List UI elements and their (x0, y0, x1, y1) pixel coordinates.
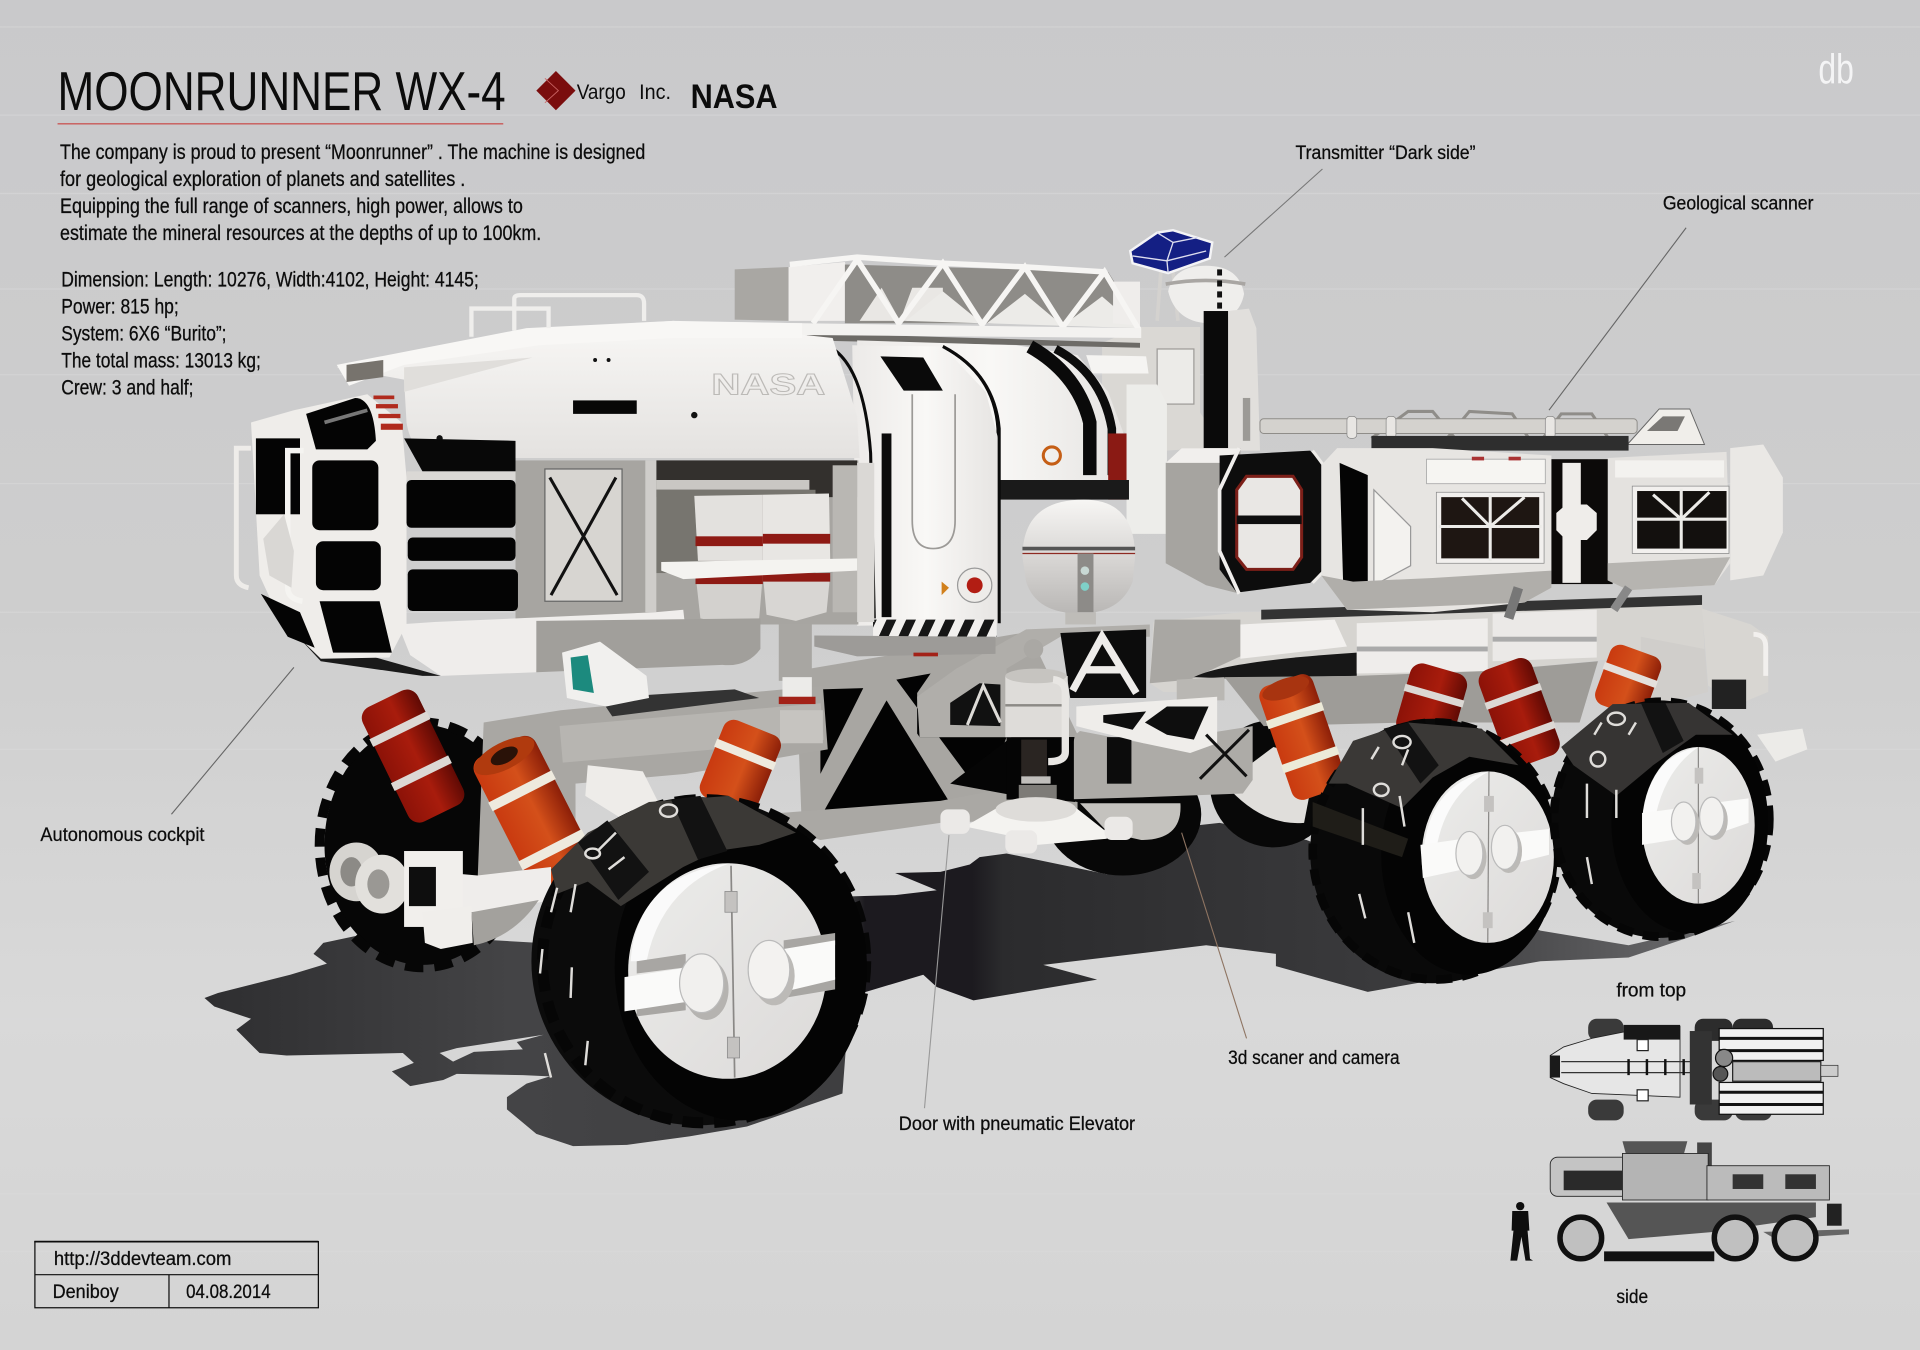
logo: Vargo Inc.: Vargo (577, 81, 626, 104)
wheel hub (624, 863, 835, 1079)
scanner window 2 (1632, 486, 1729, 553)
title underline (58, 123, 503, 125)
rear wheel (1551, 700, 1769, 938)
leader lines (171, 169, 1686, 1108)
credits box: http://3ddevteam.com (54, 1249, 231, 1270)
door module (814, 343, 1000, 656)
specifications (61, 269, 479, 399)
cockpit windows (256, 398, 518, 653)
human silhouette for scale (1510, 1202, 1533, 1261)
intro text: for geological exploration of planets and satellites . (60, 168, 465, 191)
fuel canister: front (467, 728, 600, 899)
label: 3d scanner and camera: 3d scaner and camera (1228, 1047, 1400, 1069)
stored fuel cells (694, 493, 830, 624)
vehicle (236, 230, 1807, 1125)
intro text: Equipping the full range of scanners, high power, allows to (60, 195, 523, 218)
fuel canister: centre (695, 716, 785, 817)
container: black connector with white cross (1551, 459, 1613, 584)
specifications: The total mass: 13013 kg; (61, 349, 261, 372)
red hatch button (942, 568, 992, 602)
scanner window 1 (1436, 492, 1544, 563)
elevator with pneumatic door (940, 639, 1133, 853)
spherical tank (1022, 500, 1135, 624)
canisters: rear axle (1392, 641, 1666, 771)
red warning stripes (373, 396, 403, 430)
tall rear mast (1204, 309, 1260, 452)
rear bracket with X panel (1060, 697, 1253, 840)
author logo: db (1818, 45, 1854, 92)
camera (562, 642, 649, 707)
tread knobs (540, 804, 677, 1078)
credits box: 04.08.2014 (186, 1282, 271, 1303)
side view wheels (1560, 1217, 1816, 1259)
specifications: Power: 815 hp; (61, 295, 179, 318)
container: first scanner box (1321, 448, 1551, 618)
wheels: hidden rear of middle axle (1044, 720, 1337, 876)
label: geological scanner: Geological scanner (1663, 192, 1814, 214)
bay shelf (661, 558, 857, 579)
top view drawing (1550, 1019, 1838, 1120)
module behind the top truss (735, 262, 1224, 451)
logo: Vargo Inc.: Inc. (639, 81, 671, 104)
top truss (720, 257, 1141, 348)
vertical and bent pipe (398, 460, 684, 636)
wheel hub (1642, 747, 1755, 904)
hazard stripes (873, 620, 997, 637)
caption: from top: from top (1616, 980, 1686, 1002)
label: transmitter: Transmitter “Dark side” (1296, 142, 1476, 164)
truss bracket (917, 624, 1150, 737)
front wheel (531, 796, 867, 1125)
fuel canister: rear axle front (1255, 670, 1350, 803)
container: second scanner box (1608, 444, 1783, 610)
intro text: estimate the mineral resources at the depths of up to 100km. (60, 222, 541, 245)
logo: Vargo Inc. (536, 71, 671, 110)
roof handrail (471, 295, 644, 337)
NASA hull marking: NASA (711, 368, 825, 401)
intro text (60, 141, 645, 245)
middle wheel (1310, 719, 1558, 983)
front steering arm (329, 765, 661, 949)
lower cockpit hull (276, 612, 760, 676)
logo: NASA: NASA (691, 78, 778, 116)
end cap (1730, 444, 1783, 580)
title: MOONRUNNER WX-4 (58, 60, 506, 122)
caption: side: side (1616, 1286, 1648, 1308)
tread band (1561, 703, 1733, 796)
main hull panel (337, 295, 860, 458)
tread band (551, 796, 796, 906)
label: door with elevator: Door with pneumatic Elevator (899, 1113, 1136, 1135)
open service bay (398, 460, 874, 636)
specifications: Crew: 3 and half; (61, 376, 193, 399)
intro text: The company is proud to present “Moonrunner” . The machine is designed (60, 141, 645, 164)
A frame (1060, 629, 1146, 698)
specifications: Dimension: Length: 10276, Width:4102, Height: 4145; (61, 269, 479, 292)
container: scanner hatch (1166, 448, 1340, 594)
front handrails (236, 448, 251, 588)
specifications: System: 6X6 “Burito”; (61, 322, 227, 345)
credits box: Deniboy (53, 1282, 119, 1303)
wheel hub (1420, 771, 1554, 943)
ground shadow (204, 823, 1735, 1146)
wheel: rear of front axle (320, 722, 525, 967)
tread band (1329, 722, 1518, 808)
rear dome section with stripes (857, 340, 1167, 534)
rear chassis beam (1150, 595, 1807, 762)
front suspension arm (478, 620, 828, 882)
side view drawing (1550, 1141, 1849, 1261)
transmitter antenna (1130, 230, 1245, 323)
fuel canister: rear left (357, 685, 470, 827)
X panel (545, 469, 622, 601)
rear cargo rail (1260, 409, 1704, 451)
cockpit face (236, 394, 518, 659)
credits box (34, 1242, 318, 1308)
label: autonomous cockpit: Autonomous cockpit (40, 824, 205, 846)
truss frame (780, 624, 1150, 840)
